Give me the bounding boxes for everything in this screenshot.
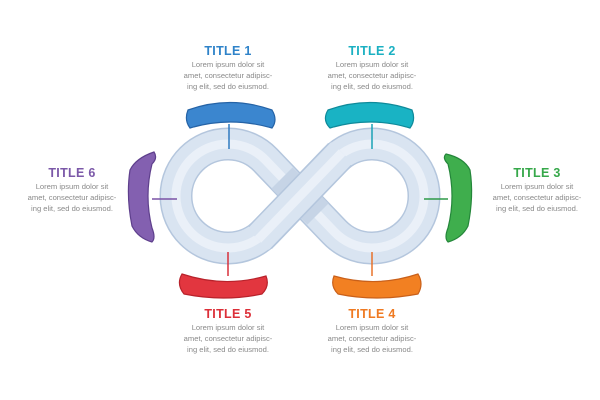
panel: title 1: TITLE 1 (204, 44, 252, 58)
panel: title 1: Lorem ipsum dolor sit (192, 60, 265, 69)
panel: title 5: amet, consectetur adipisc- (184, 334, 273, 343)
panel: title 6: Lorem ipsum dolor sit (36, 182, 109, 191)
panel: title 2: amet, consectetur adipisc- (328, 71, 417, 80)
panel: title 6: ing elit, sed do eiusmod. (31, 204, 113, 213)
panel: title 5 (179, 252, 273, 354)
panel: title 6: amet, consectetur adipisc- (28, 193, 117, 202)
panel: title 4: ing elit, sed do eiusmod. (331, 345, 413, 354)
panel: title 4: Lorem ipsum dolor sit (336, 323, 409, 332)
panel: title 2: Lorem ipsum dolor sit (336, 60, 409, 69)
panel: title 1: ing elit, sed do eiusmod. (187, 82, 269, 91)
panel: title 3: Lorem ipsum dolor sit (501, 182, 574, 191)
panel: title 6 (28, 152, 177, 242)
panel: title 3: ing elit, sed do eiusmod. (496, 204, 578, 213)
panel: title 3: TITLE 3 (513, 166, 561, 180)
infinity loop (176, 144, 424, 248)
panel: title 4: amet, consectetur adipisc- (328, 334, 417, 343)
panel: title 1: amet, consectetur adipisc- (184, 71, 273, 80)
panel: title 3: amet, consectetur adipisc- (493, 193, 582, 202)
panel: title 4: TITLE 4 (348, 307, 396, 321)
panel: title 5: Lorem ipsum dolor sit (192, 323, 265, 332)
panel: title 1 (184, 44, 275, 149)
panel: title 5: TITLE 5 (204, 307, 252, 321)
panel: title 2 (325, 44, 417, 149)
panel: title 6: TITLE 6 (48, 166, 96, 180)
panel: title 2: ing elit, sed do eiusmod. (331, 82, 413, 91)
panel: title 2: TITLE 2 (348, 44, 396, 58)
panel: title 3 (424, 154, 582, 242)
panel: title 4 (328, 252, 421, 354)
panel: title 5: ing elit, sed do eiusmod. (187, 345, 269, 354)
